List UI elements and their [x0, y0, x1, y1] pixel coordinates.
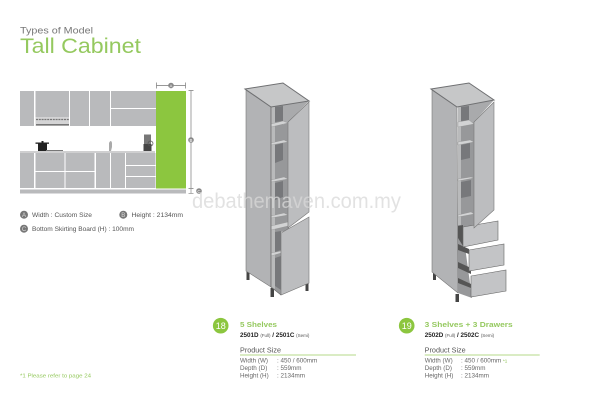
dimensions list: Width (W) — [425, 357, 453, 364]
cabinet 18: five shelves — [245, 83, 309, 297]
model codes: 2501D (Full) / 2501C (Semi) — [240, 332, 310, 339]
heading: types of model: Types of Model — [20, 26, 93, 36]
legend A: Width : Custom Size — [32, 212, 93, 219]
side wall strip — [458, 107, 461, 225]
dimensions list: Depth (D) — [240, 365, 267, 372]
door — [474, 102, 494, 228]
spec block 19 — [399, 318, 540, 380]
dimensions list: Height (H) — [425, 373, 453, 380]
dimensions list: Height (H) — [240, 373, 269, 380]
drawer 2 — [469, 244, 504, 271]
legend C: C — [22, 227, 27, 233]
number badge 18: 18 — [216, 321, 226, 331]
dimensions list: : 2134mm — [277, 373, 305, 380]
tall cabinet highlight — [156, 91, 186, 188]
interior — [458, 104, 474, 298]
upper cabinets — [20, 91, 156, 126]
door back — [469, 100, 494, 125]
lower door — [281, 217, 309, 295]
dimensions list — [425, 357, 508, 380]
footnote: *1 Please refer to page 24 — [20, 374, 91, 380]
icon: cooking pot — [36, 141, 63, 151]
legend A — [20, 211, 93, 219]
product size heading: Product Size — [425, 348, 466, 355]
model name: 5 Shelves — [240, 320, 277, 329]
kitchen elevation diagram — [20, 82, 202, 194]
divider — [425, 354, 540, 356]
hinge edge — [271, 107, 281, 295]
dimensions list: Depth (D) — [425, 365, 452, 372]
top panel — [245, 83, 309, 107]
shelves — [271, 121, 288, 256]
legend B — [119, 211, 183, 219]
number badge 18 — [213, 318, 228, 334]
range hood — [36, 117, 69, 126]
side wall strip — [271, 107, 275, 289]
left side panel — [246, 90, 271, 287]
dimensions list: : 450 / 600mm — [277, 357, 317, 364]
divider — [240, 354, 356, 356]
number badge 19 — [399, 318, 415, 334]
legend B: Height : 2134mm — [132, 212, 183, 219]
dimensions list: : 2134mm — [461, 373, 489, 380]
watermark: debathemaven.com.my — [192, 189, 401, 213]
countertop — [20, 151, 155, 153]
drawer runners — [458, 225, 471, 288]
dimensions list: : 559mm — [461, 365, 486, 372]
dimension B — [188, 90, 194, 188]
legend C: Bottom Skirting Board (H) : 100mm — [32, 226, 134, 233]
cabinet legs — [246, 271, 308, 297]
left side panel — [432, 90, 458, 293]
title: tall cabinet: Tall Cabinet — [20, 35, 141, 58]
dimension C — [188, 188, 202, 194]
compartment shadows — [275, 106, 283, 290]
base cabinets — [20, 153, 156, 188]
dimensions list: : 450 / 600mm *1 — [461, 357, 508, 364]
interior — [271, 104, 289, 295]
upper door — [288, 102, 309, 228]
dimensions list — [240, 357, 317, 380]
compartment shadows — [461, 106, 471, 198]
icon: faucet — [109, 141, 112, 151]
door back — [283, 101, 309, 125]
dimension C: C — [197, 189, 201, 194]
dimension B: B — [189, 138, 193, 143]
top panel — [431, 83, 494, 107]
shelves — [458, 120, 474, 217]
spec block 18 — [213, 318, 356, 380]
dimension A — [156, 82, 186, 88]
model codes: 2502D (Full) / 2502C (Semi) — [425, 332, 495, 339]
skirting board — [20, 190, 186, 194]
dimensions list: Width (W) — [240, 357, 268, 364]
legend B: B — [121, 213, 125, 219]
legend A: A — [22, 213, 26, 219]
cabinet legs — [433, 272, 459, 302]
dimensions list: : 559mm — [277, 365, 302, 372]
number badge 19: 19 — [402, 321, 412, 331]
product size heading: Product Size — [240, 348, 281, 355]
legend: dimensions — [20, 211, 183, 233]
drawer 3 — [471, 270, 506, 297]
cabinet 19: three shelves and three drawers — [431, 83, 506, 302]
model name: 3 Shelves + 3 Drawers — [425, 320, 513, 329]
dimension A: A — [169, 83, 173, 88]
icon: blender — [144, 134, 153, 151]
drawer 1 — [463, 221, 498, 247]
